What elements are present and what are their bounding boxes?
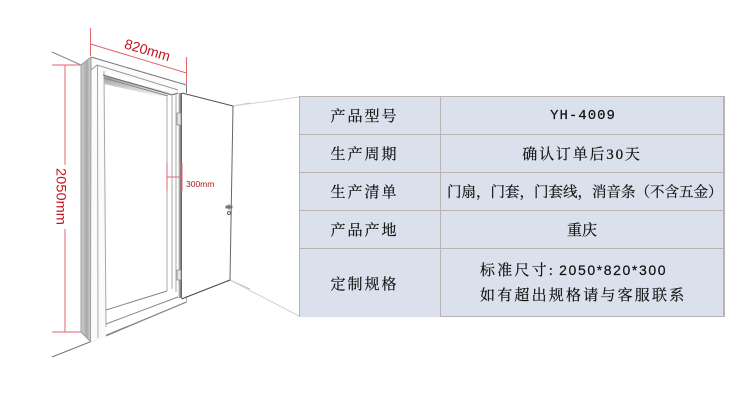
row value: production list: 门扇，门套，门套线，消音条（不含五金） <box>447 185 722 201</box>
row label: 生产清单 <box>300 173 440 210</box>
row value: production list <box>441 173 723 210</box>
row label: 产品产地: 产品产地 <box>330 223 398 239</box>
dimension: 2050mm: 2050mm <box>54 168 68 225</box>
row label: 生产周期 <box>300 135 440 172</box>
row value: custom specification: 标准尺寸: 2050*820*300 <box>480 262 667 279</box>
row value: custom specification: 如有超出规格请与客服联系 <box>480 288 686 304</box>
row value: YH-4009 <box>441 97 723 134</box>
row value: custom specification <box>441 249 723 316</box>
icon: door handle <box>226 204 232 215</box>
row value: 重庆: 重庆 <box>567 223 597 239</box>
row value: 确认订单后30天: 确认订单后30天 <box>522 147 642 163</box>
dimension: 820mm <box>90 28 186 84</box>
row label: 定制规格 <box>300 249 440 317</box>
dimension: 820mm: 820mm <box>123 36 172 64</box>
wall and floor lines <box>52 52 250 357</box>
row label: 产品型号 <box>300 97 440 134</box>
row label: 生产周期: 生产周期 <box>330 147 398 163</box>
open door leaf <box>182 93 233 299</box>
row label: 生产清单: 生产清单 <box>330 185 398 201</box>
row label: 定制规格: 定制规格 <box>330 277 398 293</box>
specification table <box>299 96 725 317</box>
row value: 确认订单后30天 <box>441 135 723 172</box>
callout lines to table <box>230 97 299 316</box>
row value: YH-4009: YH-4009 <box>550 108 616 124</box>
row label: 产品型号: 产品型号 <box>330 109 398 125</box>
hinges <box>177 113 181 280</box>
door frame <box>81 57 186 342</box>
dimension: 300mm: 300mm <box>186 179 214 189</box>
dimension: 300mm <box>167 163 214 191</box>
row label: 产品产地 <box>300 211 440 248</box>
row value: 重庆 <box>441 211 723 248</box>
